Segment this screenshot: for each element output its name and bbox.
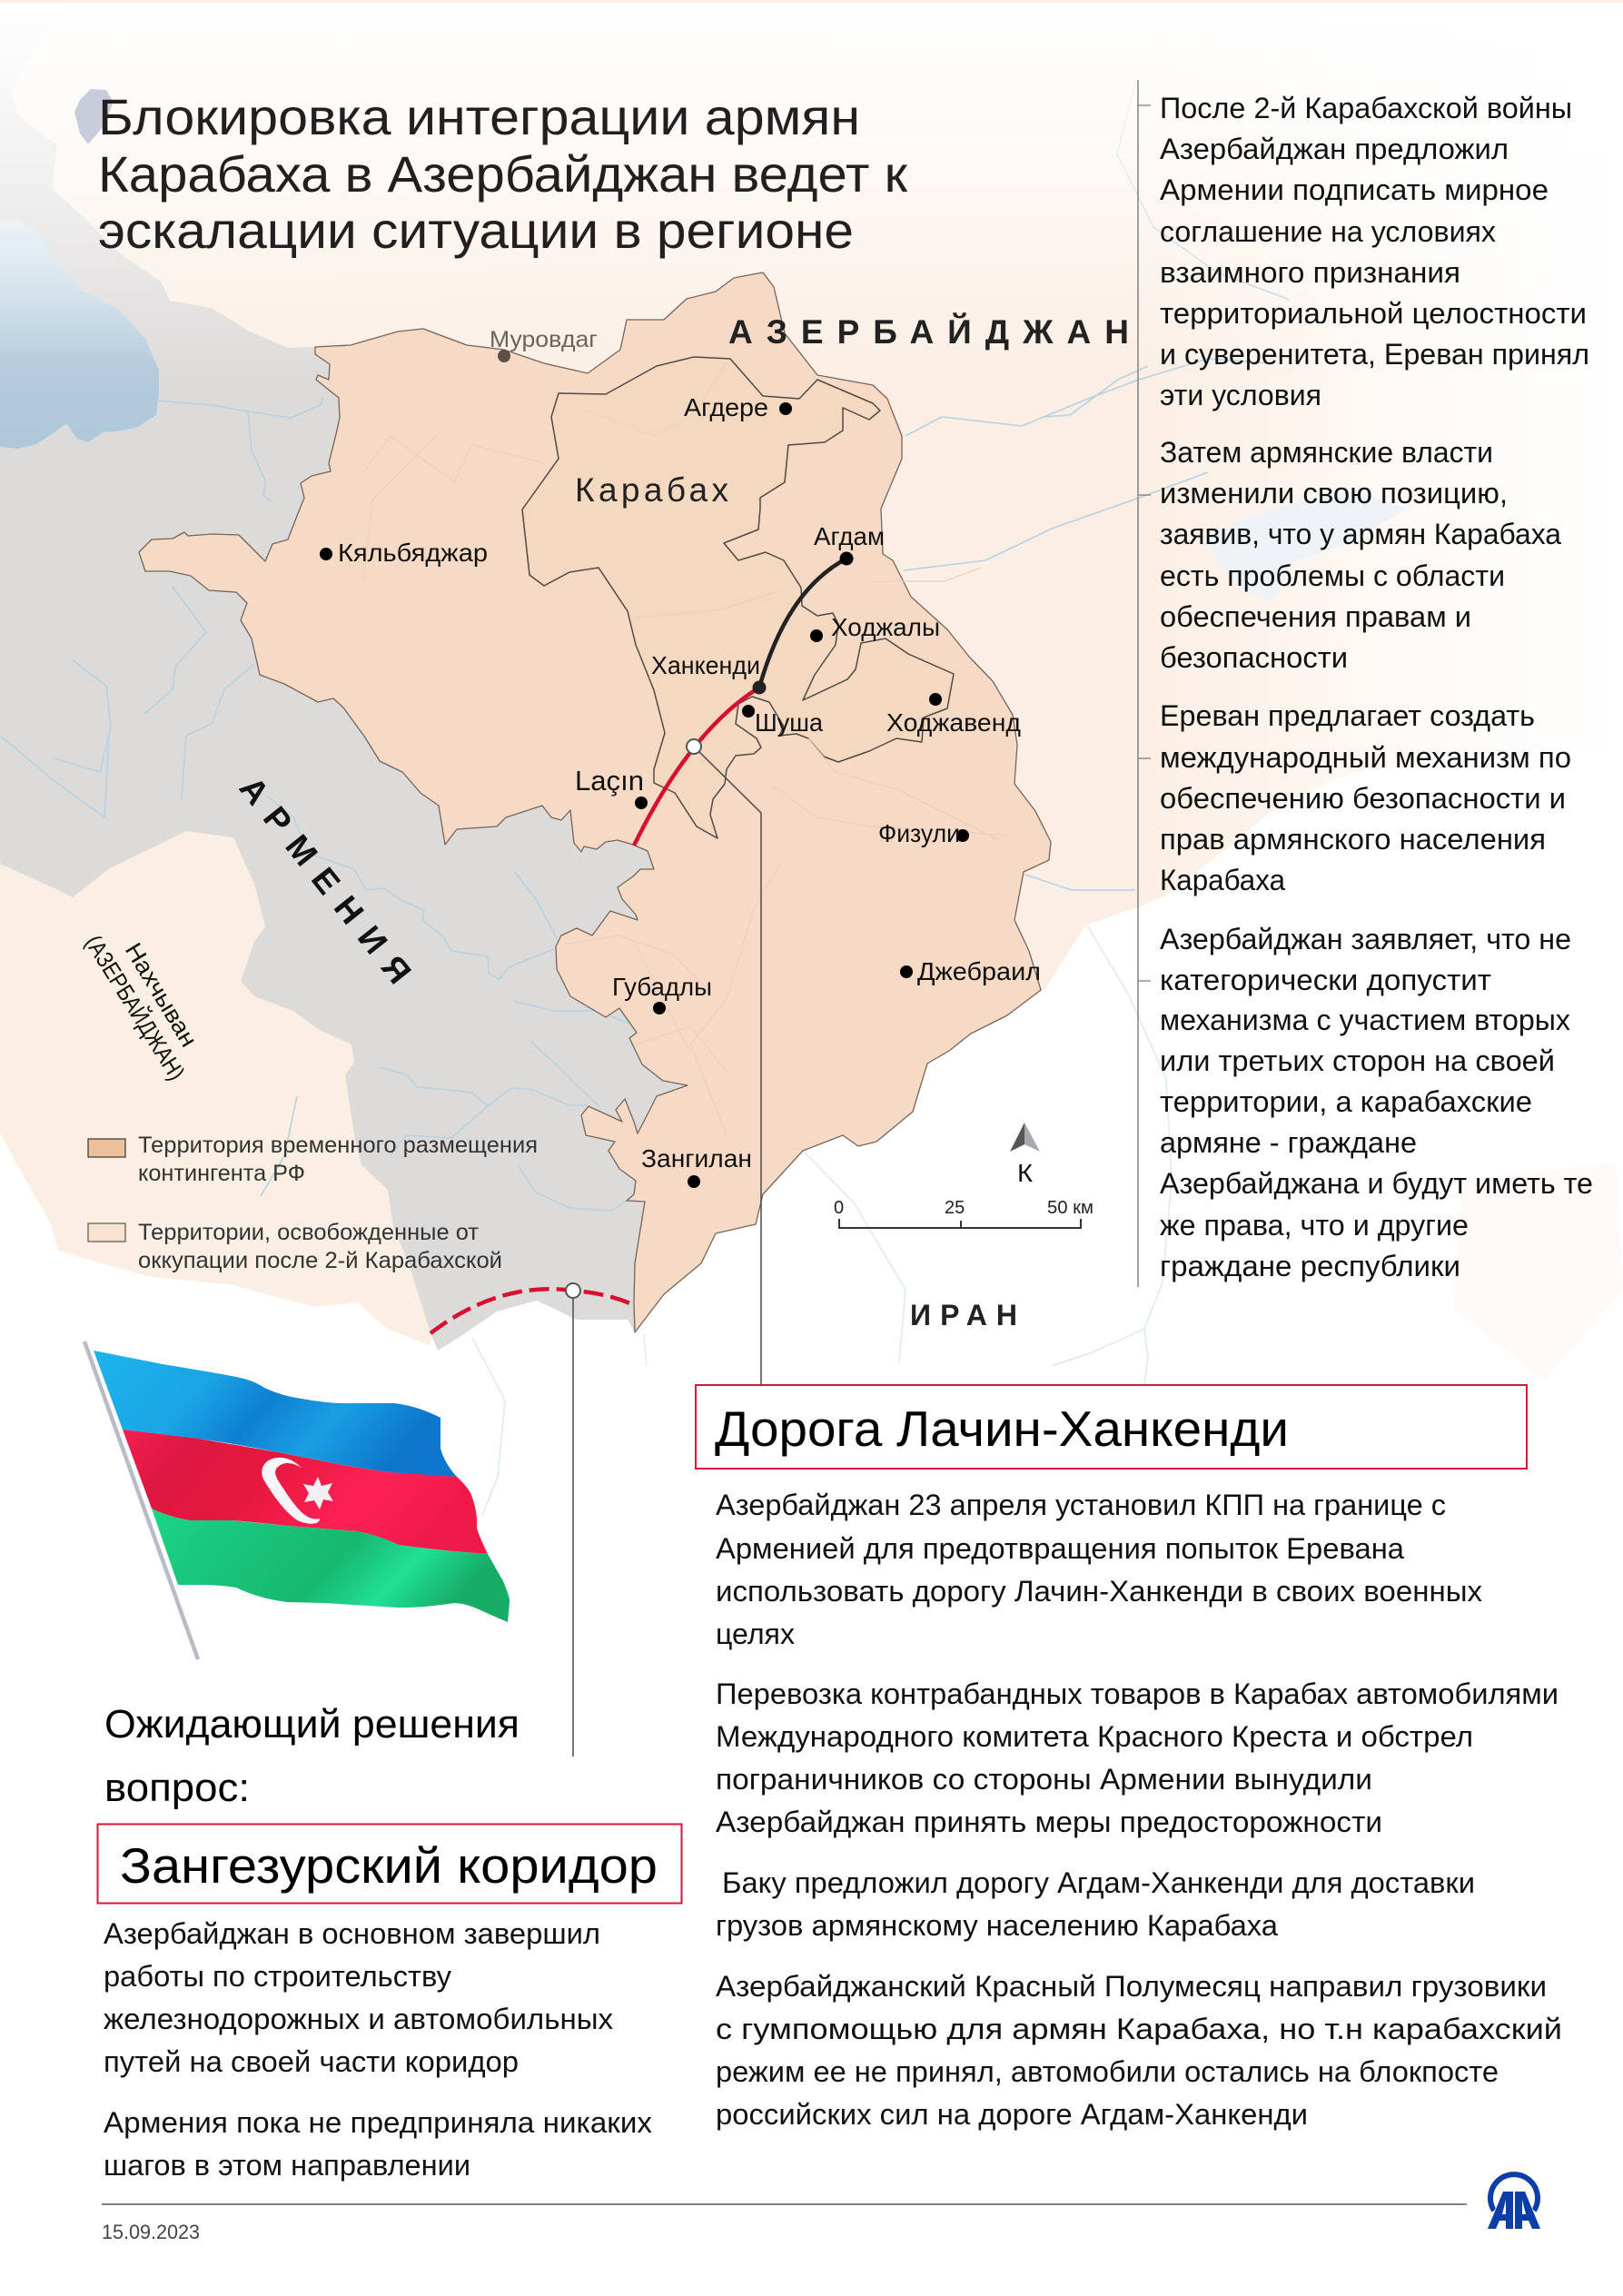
label: Khankendi: Ханкенди	[651, 651, 760, 679]
paragraph 4	[1160, 923, 1593, 1282]
road: Aghdam-Khankendi (black)	[759, 559, 846, 688]
heading: pending issue: вопрос:	[104, 1766, 250, 1810]
paragraph 1: взаимного признания	[1160, 256, 1460, 289]
paragraph 4: или третьих сторон на своей	[1160, 1044, 1555, 1077]
label: Zangilan	[641, 1144, 752, 1188]
paragraph 1: Армении подписать мирное	[1160, 173, 1549, 206]
paragraph 1: и суверенитета, Ереван принял	[1160, 338, 1589, 371]
legend item: Russian contingent	[88, 1133, 538, 1186]
label: Aghdere: Агдере	[684, 393, 768, 421]
heading: pending issue: Ожидающий решения	[104, 1702, 520, 1747]
paragraph 1: Азербайджан предложил	[1160, 133, 1509, 165]
text: Lachin road paragraphs: Перевозка контрабандных товаров в Карабах автомобилями	[716, 1677, 1559, 1710]
right column text	[1160, 92, 1593, 1282]
road: Lachin-Khankendi (red)	[634, 688, 759, 846]
paragraph 2: изменили свою позицию,	[1160, 477, 1508, 510]
paragraph 1: После 2-й Карабахской войны	[1160, 92, 1572, 124]
scale bar	[834, 1198, 1094, 1228]
label: Karabakh: Карабах	[575, 471, 728, 509]
marker: Zangezur	[566, 1283, 580, 1298]
paragraph 1: территориальной целостности	[1160, 297, 1587, 330]
legend item: Russian contingent: контингента РФ	[138, 1161, 305, 1186]
top fade	[0, 3, 1623, 384]
label: Nakhchivan: (АЗЕРБАЙДЖАН)	[80, 930, 191, 1085]
text: Lachin road paragraphs: использовать дорогу Лачин-Ханкенди в своих военных	[716, 1575, 1482, 1608]
paragraph 2: есть проблемы с области	[1160, 559, 1505, 592]
text: Lachin road paragraphs: грузов армянскому населению Карабаха	[716, 1909, 1278, 1942]
region: occupied territories	[139, 272, 1051, 1332]
icon: Azerbaijan flag	[84, 1341, 510, 1659]
paragraph 2: заявив, что у армян Карабаха	[1160, 518, 1561, 550]
heading box: Lachin-Khankendi road	[696, 1385, 1527, 1469]
paragraph 2: безопасности	[1160, 641, 1348, 674]
legend item: liberated territories	[88, 1220, 502, 1273]
date: 15.09.2023	[102, 2221, 200, 2243]
title: Блокировка интеграции армян	[98, 88, 860, 145]
text: Lachin road paragraphs: с гумпомощью для армян Карабаха, но т.н карабахский	[716, 2013, 1562, 2045]
footer rule	[102, 2203, 1467, 2205]
title: эскалации ситуации в регионе	[98, 202, 854, 259]
heading box: Lachin-Khankendi road: Дорога Лачин-Ханкенди	[715, 1400, 1289, 1457]
paragraph 1	[1160, 92, 1589, 411]
faint east lake	[1203, 490, 1408, 602]
label: Gubadly: Губадлы	[612, 973, 712, 1001]
icon: north arrow: К	[1017, 1159, 1034, 1187]
paragraph 4: армяне - граждане	[1160, 1126, 1417, 1159]
flag crescent	[262, 1458, 320, 1524]
paragraph 4: же права, что и другие	[1160, 1209, 1469, 1242]
label: Kelbajar: Кяльбяджар	[338, 539, 488, 567]
label: Gubadly	[612, 973, 712, 1014]
label: Lachin	[575, 765, 648, 809]
small lake	[74, 89, 114, 144]
text: Zangezur paragraphs	[104, 1917, 652, 2182]
text: Lachin road paragraphs: целях	[716, 1618, 795, 1650]
label: Azerbaijan: АЗЕРБАЙДЖАН	[728, 312, 1129, 351]
text: Lachin road paragraphs: российских сил на дороге Агдам-Ханкенди	[716, 2098, 1308, 2131]
marker: Lachin road	[687, 739, 701, 754]
label: Zangilan: Зангилан	[641, 1144, 752, 1173]
callout line to Lachin road box	[694, 747, 761, 1385]
paragraph 2	[1160, 436, 1561, 674]
right column rule with ticks	[1138, 80, 1151, 1287]
legend item: liberated territories: оккупации после 2-й Карабахской	[138, 1248, 502, 1273]
paragraph 3: международный механизм по	[1160, 741, 1571, 774]
title	[98, 88, 908, 259]
label: Lachin: Laçın	[575, 765, 644, 797]
paragraph 1: эти условия	[1160, 379, 1321, 411]
text: Lachin road paragraphs: Азербайджан 23 апреля установил КПП на границе с	[716, 1489, 1446, 1521]
text: Zangezur paragraphs: путей на своей части коридор	[104, 2045, 519, 2078]
text: Zangezur paragraphs: Армения пока не предприняла никаких	[104, 2106, 652, 2139]
paragraph 4: территории, а карабахские	[1160, 1085, 1532, 1118]
text: Lachin road paragraphs	[716, 1489, 1562, 2131]
label: Aghdam	[814, 522, 885, 565]
text: Lachin road paragraphs: Арменией для предотвращения попыток Еревана	[716, 1532, 1404, 1565]
legend item: Russian contingent: Территория временного размещения	[138, 1133, 538, 1158]
paragraph 2: Затем армянские власти	[1160, 436, 1493, 469]
label: Khojavend: Ходжавенд	[886, 708, 1021, 737]
paragraph 2: обеспечения правам и	[1160, 600, 1471, 633]
armenia area	[0, 0, 690, 1351]
label: Fuzuli: Физули	[878, 819, 960, 847]
scale bar: 50 км	[1047, 1198, 1094, 1218]
label: Aghdam: Агдам	[814, 522, 885, 550]
text: Lachin road paragraphs: Азербайджан принять меры предосторожности	[716, 1806, 1382, 1838]
inner rivers	[363, 363, 1008, 1135]
lake	[0, 220, 159, 449]
paragraph 4: механизма с участием вторых	[1160, 1004, 1570, 1036]
label: Khojaly: Ходжалы	[831, 613, 940, 641]
legend	[88, 1133, 538, 1273]
text: Zangezur paragraphs: работы по строительству	[104, 1960, 451, 1993]
paragraph 1: соглашение на условиях	[1160, 215, 1496, 248]
heading box: Zangezur corridor	[98, 1824, 681, 1904]
label: Iran: ИРАН	[910, 1299, 1017, 1331]
Zangezur corridor dashed line	[430, 1289, 634, 1333]
text: Zangezur paragraphs: шагов в этом направлении	[104, 2149, 470, 2182]
legend item: liberated territories: Территории, освобожденные от	[138, 1220, 480, 1245]
paragraph 4: Азербайджан заявляет, что не	[1160, 923, 1571, 955]
paragraph 3: прав армянского населения	[1160, 823, 1546, 856]
callout line to Zangezur	[572, 1291, 574, 1757]
paragraph 3: обеспечению безопасности и	[1160, 782, 1566, 815]
paragraph 4: категорически допустит	[1160, 964, 1491, 996]
map labels	[80, 312, 1129, 1331]
text: Lachin road paragraphs: режим ее не принял, автомобили остались на блокпосте	[716, 2055, 1499, 2088]
text: Zangezur paragraphs: железнодорожных и автомобильных	[104, 2003, 613, 2035]
title: Карабаха в Азербайджан ведет к	[98, 145, 908, 203]
scale bar: 25	[945, 1198, 965, 1218]
icon: AA logo	[1488, 2174, 1540, 2229]
text: Lachin road paragraphs: пограничников со стороны Армении вынудили	[716, 1763, 1372, 1796]
label: Murovdag: Муровдаг	[490, 327, 598, 352]
heading box: Zangezur corridor: Зангезурский коридор	[120, 1837, 658, 1894]
text: Zangezur paragraphs: Азербайджан в основном завершил	[104, 1917, 600, 1950]
text: Lachin road paragraphs: Международного комитета Красного Креста и обстрел	[716, 1720, 1473, 1753]
nakhchivan area	[0, 831, 436, 1346]
text: Lachin road paragraphs: Азербайджанский Красный Полумесяц направил грузовики	[716, 1970, 1547, 2003]
label: Armenia: АРМЕНИЯ	[233, 770, 419, 991]
text: Lachin road paragraphs: Баку предложил дорогу Агдам-Ханкенди для доставки	[722, 1866, 1475, 1899]
paragraph 3: Карабаха	[1160, 864, 1285, 896]
paragraph 4: граждане республики	[1160, 1250, 1460, 1282]
heading: pending issue	[104, 1702, 520, 1810]
label: Nakhchivan: Нахчыван	[120, 938, 203, 1052]
region: Karabakh	[522, 357, 954, 838]
label: Jabrayil: Джебраил	[917, 957, 1041, 985]
paragraph 3: Ереван предлагает создать	[1160, 699, 1535, 732]
label: Shusha: Шуша	[755, 708, 823, 737]
label: Khojavend	[886, 693, 1021, 737]
label: Murovdag	[490, 327, 598, 362]
paragraph 4: Азербайджана и будут иметь те	[1160, 1167, 1593, 1200]
paragraph 3	[1160, 699, 1571, 896]
label: Khankendi	[651, 651, 767, 694]
rivers	[0, 82, 1290, 1515]
scale bar: 0	[834, 1198, 844, 1218]
icon: north arrow	[1010, 1123, 1040, 1187]
flag star	[303, 1477, 333, 1509]
